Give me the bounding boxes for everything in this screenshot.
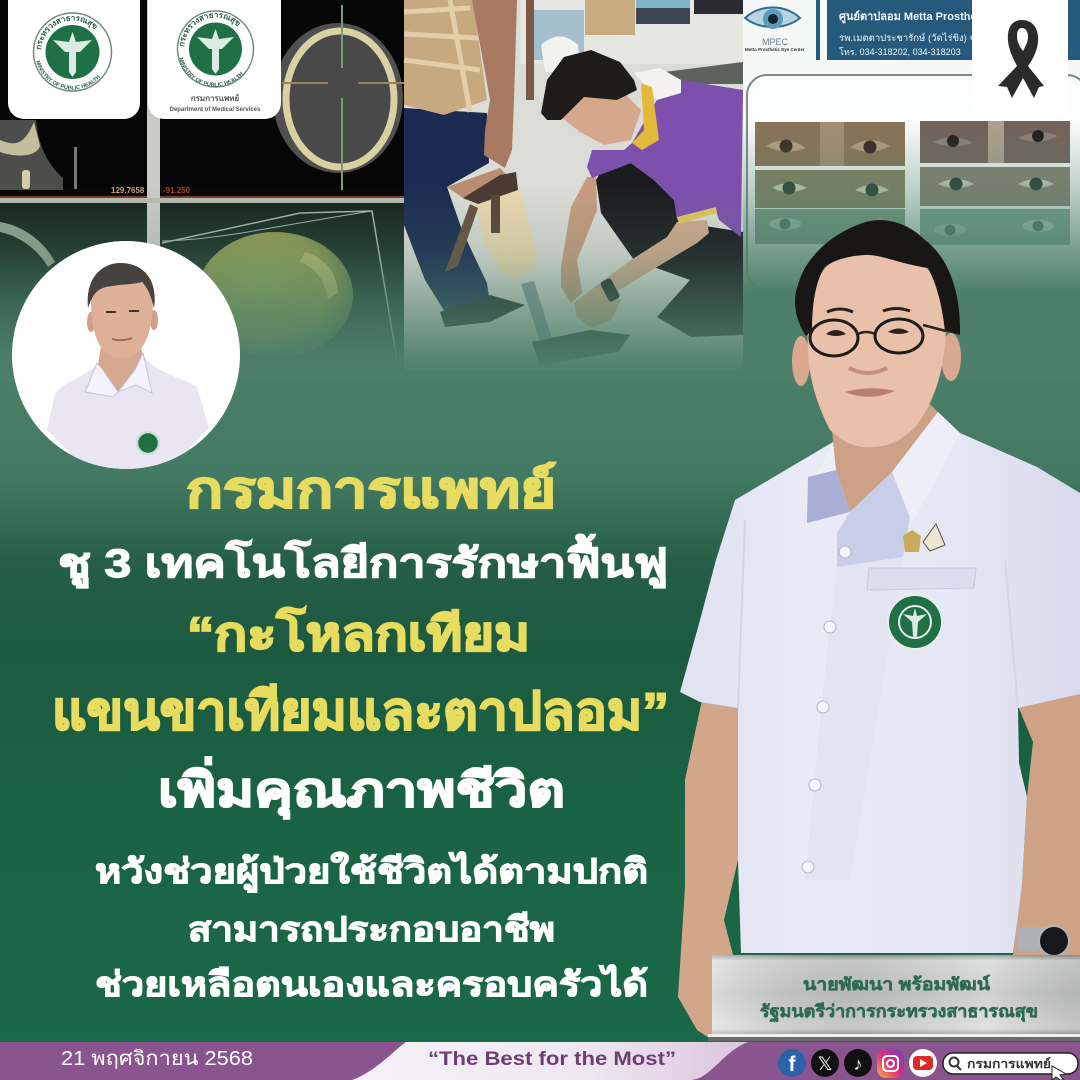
collar left bbox=[807, 442, 850, 523]
sign header: รพ.เมตตาประชารักษ์ (วัดไร่ขิง) จ.นครปฐม bbox=[839, 32, 1013, 44]
headline: prosthetic limbs and eyes: แขนขาเทียมและตาปลอม” bbox=[52, 683, 669, 741]
logo card: Department of Medical Services bbox=[148, 0, 281, 119]
standing man bbox=[404, 0, 630, 365]
green fade over eye board bbox=[743, 120, 1080, 292]
watch bbox=[1017, 926, 1069, 956]
sign header: MPEC bbox=[762, 37, 789, 47]
logo card: Ministry of Public Health bbox=[8, 0, 140, 119]
photo: minister bbox=[678, 220, 1080, 1040]
glasses bbox=[806, 325, 946, 334]
logo card: mourning ribbon bbox=[972, 0, 1068, 119]
pocket bbox=[867, 568, 976, 590]
name plate bbox=[708, 955, 1080, 1041]
left arm bbox=[678, 700, 738, 1040]
badge bbox=[888, 595, 942, 649]
sign header bbox=[745, 0, 1080, 60]
face bbox=[808, 248, 946, 447]
icon: instagram bbox=[877, 1049, 904, 1078]
icon: facebook: f bbox=[788, 1053, 796, 1076]
collar right bbox=[892, 412, 960, 522]
eyes bbox=[826, 330, 846, 336]
logo card: Department of Medical Services: กระทรวงสาธารณสุข bbox=[180, 12, 240, 46]
kneeling man bbox=[541, 50, 743, 337]
ears bbox=[792, 336, 810, 386]
sign header: ศูนย์ตาปลอม Metta Prosthetic bbox=[839, 10, 989, 24]
headline: three technologies: ชู 3 เทคโนโลยีการรักษาฟื้นฟู bbox=[58, 534, 668, 588]
date: 21 พฤศจิกายน 2568 bbox=[61, 1048, 253, 1070]
shirt placket bbox=[837, 472, 910, 567]
slogan: “The Best for the Most” bbox=[428, 1049, 676, 1070]
photo: prosthetic leg fitting bbox=[404, 0, 743, 370]
right arm bbox=[1013, 692, 1080, 955]
logo card: Ministry of Public Health: กระทรวงสาธารณสุข bbox=[36, 16, 98, 50]
name: นายพัฒนา พร้อมพัฒน์ bbox=[803, 974, 990, 994]
search box: กรมการแพทย์ bbox=[967, 1057, 1051, 1071]
hair bbox=[795, 220, 960, 336]
icon: X bbox=[811, 1049, 839, 1077]
photo: CT skull scans bbox=[0, 0, 404, 373]
icon: X: 𝕏 bbox=[817, 1054, 833, 1075]
pin bbox=[903, 530, 921, 552]
portrait: department official bbox=[12, 241, 240, 480]
sign header: Metta Prosthetic Eye Center bbox=[745, 47, 805, 52]
slogan panel bbox=[352, 1042, 748, 1080]
mouth bbox=[845, 388, 895, 397]
headline: prosthetic skull: “กะโหลกเทียม bbox=[187, 606, 530, 660]
green fade over photos bbox=[0, 185, 743, 380]
icon: cursor bbox=[1052, 1066, 1066, 1080]
logo card: Department of Medical Services: MINISTRY OF PUBLIC HEALTH bbox=[179, 58, 243, 86]
logo card: Department of Medical Services: Department of Medical Services bbox=[170, 107, 261, 113]
icon: tiktok bbox=[844, 1049, 872, 1077]
footer bar bbox=[0, 1042, 1080, 1080]
photo: prosthetic eye center board bbox=[743, 0, 1080, 300]
icon: tiktok: ♪ bbox=[854, 1054, 862, 1074]
photo: CT skull scans: -91.250 bbox=[163, 186, 191, 195]
neck bbox=[830, 395, 938, 512]
sign header: โทร. 034-318202, 034-318203 bbox=[839, 47, 961, 57]
buttons bbox=[839, 546, 851, 558]
eyebrows bbox=[827, 308, 910, 312]
headline: department name: กรมการแพทย์ bbox=[186, 462, 556, 518]
logo card: Department of Medical Services: กรมการแพทย์ bbox=[191, 93, 240, 103]
body text: support self and family: ช่วยเหลือตนเองและครอบครัวได้ bbox=[95, 964, 648, 1004]
eye photos bbox=[755, 121, 1070, 245]
position: รัฐมนตรีว่าการกระทรวงสาธารณสุข bbox=[760, 1001, 1038, 1023]
icon: youtube bbox=[909, 1049, 937, 1077]
nose bbox=[849, 368, 887, 373]
icon: facebook bbox=[778, 1049, 806, 1077]
body text: normal life: หวังช่วยผู้ป่วยใช้ชีวิตได้ตามปกติ bbox=[95, 851, 648, 893]
room background bbox=[520, 0, 743, 100]
body text: able to work: สามารถประกอบอาชีพ bbox=[188, 911, 555, 949]
shirt bbox=[680, 412, 1080, 953]
headline: quality of life: เพิ่มคุณภาพชีวิต bbox=[158, 756, 565, 819]
search box bbox=[943, 1053, 1078, 1074]
logo card: Ministry of Public Health: MINISTRY OF PUBLIC HEALTH bbox=[36, 60, 100, 90]
photo: CT skull scans: 129.7658 bbox=[111, 186, 145, 195]
